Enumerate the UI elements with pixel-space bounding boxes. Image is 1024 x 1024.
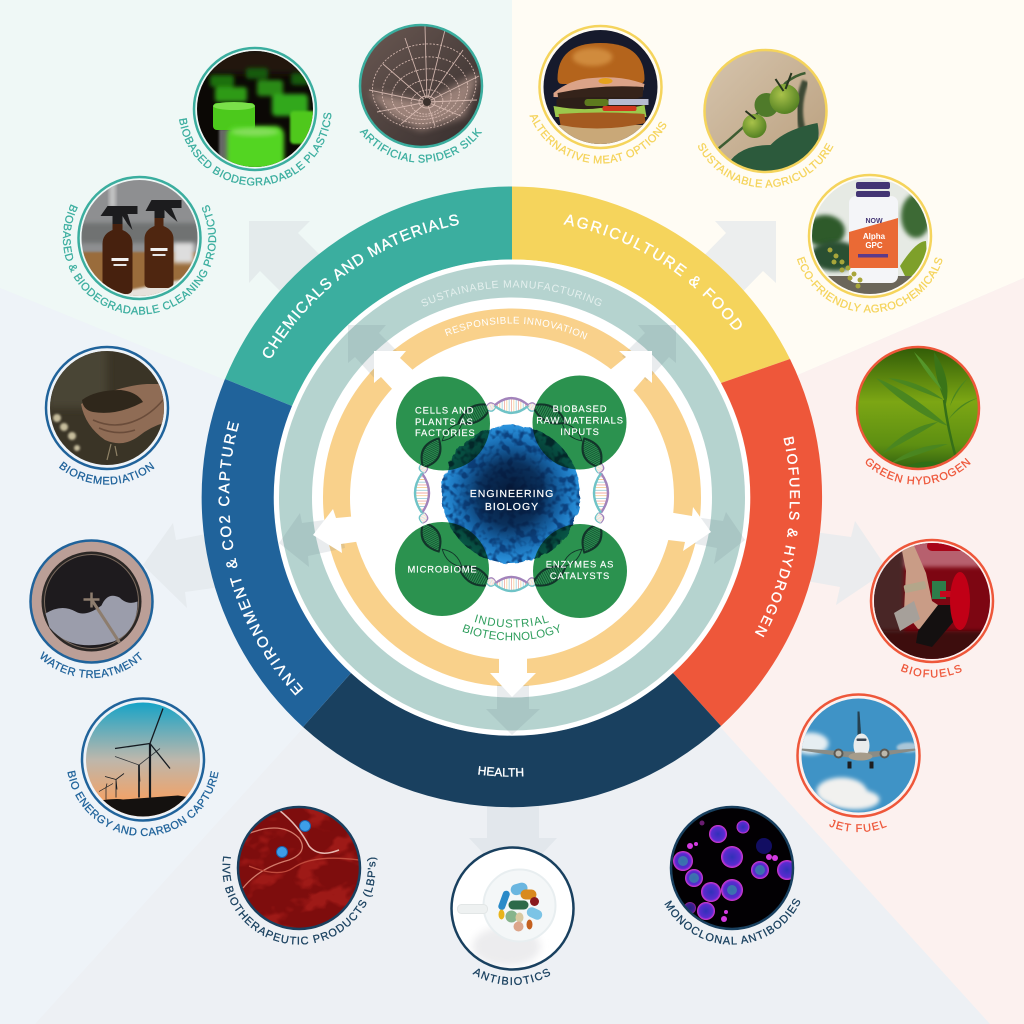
- photo: red tissue with blue cells: [237, 806, 361, 930]
- inner disc: [274, 260, 750, 736]
- photo: clarifier tank: [30, 540, 154, 664]
- label: JET FUEL: [829, 820, 887, 832]
- photo: supplement bottle: [805, 175, 931, 297]
- panel: antibiotics: [450, 846, 575, 986]
- green circle: cells and plants as factories: [396, 376, 490, 470]
- engineering biology cell: [441, 424, 581, 564]
- photo: hands holding soil: [46, 347, 168, 469]
- sector: environment and CO2 capture: ENVIRONMENT & CO2 CAPTURE: [218, 421, 304, 696]
- text: cells and plants as factories: FACTORIES: [415, 427, 476, 438]
- text: cells and plants as factories: PLANTS AS: [415, 416, 474, 427]
- text: enzymes as catalysts: CATALYSTS: [550, 570, 610, 581]
- photo: fluorescent cells: [670, 806, 797, 930]
- panel: biofuels: [870, 538, 994, 678]
- inner translucent arrows: [279, 325, 745, 735]
- arrow: to chemicals and materials: [249, 221, 345, 318]
- text: biobased raw materials inputs: RAW MATERIALS: [536, 414, 624, 426]
- photo: supplement bottle: GPC: [865, 241, 883, 250]
- arrow: to agriculture and food: [680, 221, 776, 318]
- photo: green leaves: [856, 346, 980, 470]
- text: engineering biology: ENGINEERING: [470, 488, 554, 500]
- DNA helix strands inside green circles: [416, 398, 607, 592]
- ring: responsible innovation: [323, 308, 701, 686]
- text: biobased raw materials inputs: BIOBASED: [553, 403, 607, 414]
- label: ALTERNATIVE MEAT OPTIONS: [529, 115, 666, 164]
- photo: wind turbines at sunset: [82, 698, 204, 820]
- photo: pills in a glass: [450, 846, 574, 970]
- text: engineering biology: BIOLOGY: [485, 501, 539, 513]
- sector: chemicals and materials: [225, 186, 512, 406]
- sector: agriculture and food: [512, 186, 790, 383]
- text: enzymes as catalysts: ENZYMES AS: [546, 558, 614, 570]
- label: ECO-FRIENDLY AGROCHEMICALS: [796, 256, 942, 313]
- text: industrial biotechnology second line: BIOTECHNOLOGY: [462, 624, 560, 640]
- photo: airplane in sky: [792, 694, 920, 816]
- ring: sustainable manufacturing: [279, 264, 745, 730]
- sector: environment and CO2 capture: [202, 379, 351, 727]
- panel: live biotherapeutic products: [222, 806, 378, 945]
- label: BIO ENERGY AND CARBON CAPTURE: [67, 770, 219, 836]
- photo: amber spray bottles: [78, 177, 200, 300]
- photo: burger: [540, 26, 662, 148]
- photo: supplement bottle: Alpha: [863, 232, 886, 241]
- photo: green bottle caps: [194, 48, 316, 170]
- ring: responsible innovation: RESPONSIBLE INNOVATION: [444, 316, 588, 340]
- arrow: to environment and CO2 capture: [143, 523, 235, 608]
- DNA helix loop: [415, 398, 608, 591]
- panel: green hydrogen: [856, 346, 980, 485]
- text: biobased raw materials inputs: INPUTS: [560, 426, 600, 437]
- panel: monoclonal antibodies: [664, 806, 800, 945]
- photo: green tomatoes: [704, 49, 828, 173]
- photo: spider web: [359, 24, 483, 148]
- panel: eco-friendly agrochemicals: [796, 174, 942, 313]
- green circle: enzymes as catalysts: [533, 524, 627, 618]
- panel: sustainable agriculture: [698, 48, 834, 188]
- panel: bio energy and carbon capture: [67, 697, 219, 836]
- text: industrial biotechnology: INDUSTRIAL: [474, 614, 549, 628]
- green circle: biobased raw materials inputs: [532, 376, 626, 470]
- label: BIOREMEDIATION: [59, 461, 154, 485]
- label: WATER TREATMENT: [40, 651, 142, 678]
- panel: bioremediation: [44, 346, 170, 485]
- outer ring with five sectors: [150, 146, 851, 848]
- sector: biofuels and hydrogen: [673, 359, 822, 726]
- arrow: to health: [469, 790, 557, 885]
- label: ANTIBIOTICS: [472, 968, 550, 986]
- text: cells and plants as factories: CELLS AND: [415, 404, 474, 416]
- sector: agriculture and food: AGRICULTURE & FOOD: [563, 214, 742, 330]
- label: SUSTAINABLE AGRICULTURE: [698, 142, 834, 188]
- label: ARTIFICIAL SPIDER SILK: [360, 128, 482, 163]
- label: LIVE BIOTHERAPEUTIC PRODUCTS (LBP's): [222, 856, 378, 945]
- label: BIOBASED & BIODEGRADABLE CLEANING PRODUCTS: [62, 204, 216, 315]
- sector: biofuels and hydrogen: BIOFUELS & HYDROGEN: [754, 436, 800, 638]
- panel: biobased biodegradable plastics: [179, 46, 332, 186]
- label: BIOBASED BIODEGRADABLE PLASTICS: [179, 112, 332, 186]
- arrow: to biofuels and hydrogen: [790, 521, 888, 605]
- sector: health: [303, 673, 721, 808]
- label: GREEN HYDROGEN: [866, 458, 971, 485]
- text: microbiome: MICROBIOME: [408, 564, 477, 574]
- white arrows cutting the innovation ring: [313, 351, 711, 697]
- panel: alternative meat options: [529, 24, 666, 164]
- panel: biobased and biodegradable cleaning products: [62, 176, 216, 315]
- panel: jet fuel: [796, 693, 921, 832]
- photo: fuel nozzle: [871, 540, 993, 662]
- panel: water treatment: [29, 539, 154, 678]
- label: BIOFUELS: [900, 664, 962, 678]
- photo: supplement bottle: NOW: [865, 218, 883, 225]
- label: MONOCLONAL ANTIBODIES: [664, 898, 800, 945]
- sector: health: HEALTH: [478, 766, 524, 777]
- ring: sustainable manufacturing: SUSTAINABLE MANUFACTURING: [421, 280, 602, 306]
- sector: chemicals and materials: CHEMICALS AND MATERIALS: [262, 214, 459, 358]
- green circle: microbiome: [395, 522, 489, 616]
- panel: artificial spider silk: [358, 24, 484, 163]
